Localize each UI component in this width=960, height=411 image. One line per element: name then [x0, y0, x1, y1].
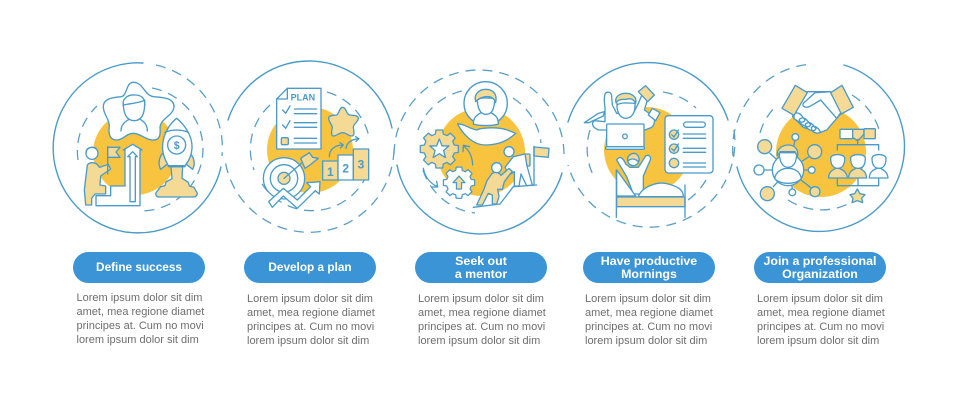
text block: lorem ipsum dolor sit dim: [418, 335, 540, 347]
text block: [76, 292, 204, 346]
text block: principes at. Cum no movi: [418, 321, 545, 333]
yellow disc: [776, 107, 866, 197]
text block: principes at. Cum no movi: [757, 321, 884, 333]
panel: define success: [53, 63, 222, 233]
panel: develop a plan: [225, 61, 394, 232]
icon: star: [329, 107, 358, 136]
icon: laptop: [606, 124, 644, 149]
text block: Lorem ipsum dolor sit dim: [418, 293, 544, 305]
text block: Lorem ipsum dolor sit dim: [757, 293, 883, 305]
icon: climbers and flag: [473, 146, 549, 207]
icon: numbered podium: [323, 137, 369, 180]
text block: [418, 293, 546, 347]
icon: climber with flag: [84, 147, 120, 205]
icon: handshake, network, org chart: [754, 85, 888, 203]
text block: amet, mea regione diamet: [418, 307, 546, 319]
step 2 label and text: [244, 252, 376, 347]
icon: multitasker, checklist, bed: [584, 86, 713, 217]
text block: amet, mea regione diamet: [757, 307, 885, 319]
yellow disc: [267, 107, 353, 193]
pill: join a professional organization: Join a professional: [764, 254, 876, 268]
icon: people network: [754, 134, 822, 201]
text block: lorem ipsum dolor sit dim: [757, 335, 879, 347]
icon: puzzle pieces: [840, 129, 875, 141]
outer ring: [568, 63, 735, 227]
icon: star with person: [103, 82, 174, 140]
inner dashed ring: [760, 95, 880, 210]
icon: arrow gear: [443, 167, 475, 198]
pill: have productive mornings: [583, 252, 715, 283]
text block: lorem ipsum dolor sit dim: [76, 334, 199, 346]
icon: plan, target, podium: [263, 88, 369, 208]
text block: Lorem ipsum dolor sit dim: [247, 293, 373, 305]
panel: have productive mornings: [568, 63, 735, 227]
text block: Lorem ipsum dolor sit dim: [585, 293, 711, 305]
pill: seek out a mentor: a mentor: [455, 267, 507, 281]
inner dashed ring: [77, 88, 203, 211]
step 4 label and text: [583, 252, 715, 347]
outer ring: [225, 61, 394, 232]
icon: mentor, hand, gears, climbers: [420, 82, 549, 207]
outer ring: [53, 63, 222, 233]
icon: plan document: PLAN: [291, 92, 315, 102]
pill: join a professional organization: [754, 252, 886, 283]
pill: define success: Define success: [96, 260, 182, 274]
icon: numbered podium: 1: [327, 165, 334, 179]
icon: org chart team: [829, 139, 888, 186]
pill: join a professional organization: Organization: [782, 267, 858, 281]
step 3 label and text: [415, 252, 547, 347]
text block: [585, 293, 713, 347]
text block: amet, mea regione diamet: [76, 306, 204, 318]
yellow disc: [437, 108, 525, 196]
icon: star gear: [420, 130, 458, 168]
pill: have productive mornings: Mornings: [621, 267, 677, 281]
icon: handshake: [782, 85, 853, 133]
inner dashed ring: [418, 91, 541, 213]
text block: principes at. Cum no movi: [585, 321, 712, 333]
yellow disc: [93, 111, 177, 195]
pill: have productive mornings: Have productive: [601, 254, 697, 268]
step 5 label and text: [754, 252, 886, 347]
icon: rocket with dollar: $: [174, 140, 180, 152]
text block: amet, mea regione diamet: [247, 307, 375, 319]
icon: small star: [850, 189, 865, 203]
icon: multitasking person: [584, 86, 660, 130]
pill: seek out a mentor: Seek out: [455, 254, 507, 268]
icon: numbered podium: 2: [342, 162, 349, 176]
icon: open hand: [458, 124, 516, 145]
text block: lorem ipsum dolor sit dim: [247, 335, 369, 347]
panel: join a professional organization: [733, 64, 904, 231]
inner dashed ring: [587, 92, 706, 200]
text block: amet, mea regione diamet: [585, 307, 713, 319]
icon: bed with stretching person: [616, 153, 685, 217]
pill: develop a plan: Develop a plan: [268, 260, 352, 274]
text block: [247, 293, 375, 347]
outer ring: [733, 64, 904, 231]
icon: numbered podium: 3: [358, 157, 365, 171]
step 1 label and text: [73, 252, 205, 346]
text block: [757, 293, 885, 347]
text block: principes at. Cum no movi: [247, 321, 374, 333]
arrows between gears: [423, 145, 473, 187]
panel: seek out a mentor: [394, 70, 564, 234]
text block: Lorem ipsum dolor sit dim: [76, 292, 202, 304]
text block: principes at. Cum no movi: [76, 320, 204, 332]
yellow disc: [604, 107, 690, 193]
pill: seek out a mentor: [415, 252, 547, 283]
icon: target with arrow: [263, 153, 318, 199]
icon: checklist board: [665, 116, 713, 173]
icon: mentor portrait: [464, 82, 507, 125]
icon: zigzag trend arrow: [269, 182, 320, 208]
inner dashed ring: [250, 92, 369, 211]
icon: star person, rocket and climber: [84, 82, 197, 206]
outer ring: [394, 70, 564, 234]
icon: stairs with arrow: [96, 144, 142, 206]
text block: lorem ipsum dolor sit dim: [585, 335, 707, 347]
